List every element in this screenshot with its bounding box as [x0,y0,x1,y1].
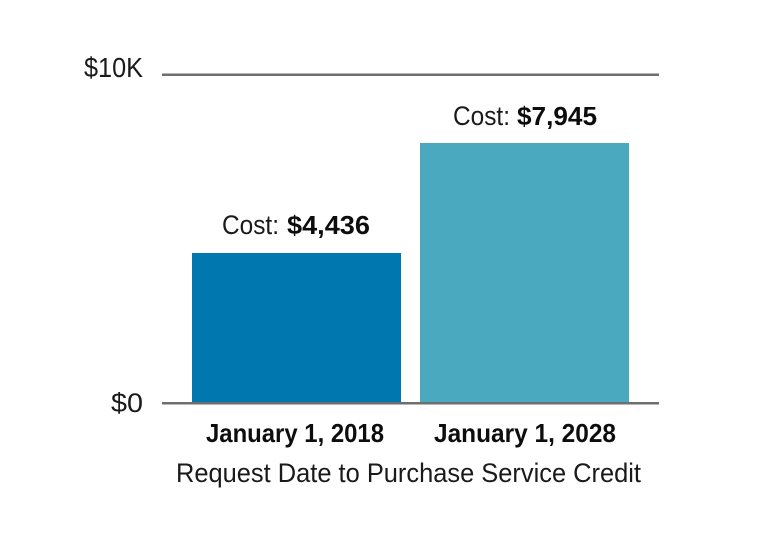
bar: January 1, 2018 [192,253,401,403]
x-axis title: Request Date to Purchase Service Credit [176,458,642,488]
value label: 2028 cost: Cost: [453,101,510,131]
value label: 2018 cost: $4,436 [287,212,370,240]
top gridline at $10K [162,74,659,76]
category label: January 1, 2028: January 1, 2028 [434,418,616,448]
value label: 2028 cost: $7,945 [517,103,597,131]
y-axis label: $10K: $10K [84,52,143,83]
value label: 2018 cost [222,210,370,240]
bar: January 1, 2028 [420,143,629,403]
y-axis label: $0: $0 [111,388,143,418]
value label: 2018 cost: Cost: [222,210,279,240]
value label: 2028 cost [453,101,597,131]
category label: January 1, 2018: January 1, 2018 [206,418,384,448]
baseline at $0 [162,402,659,404]
